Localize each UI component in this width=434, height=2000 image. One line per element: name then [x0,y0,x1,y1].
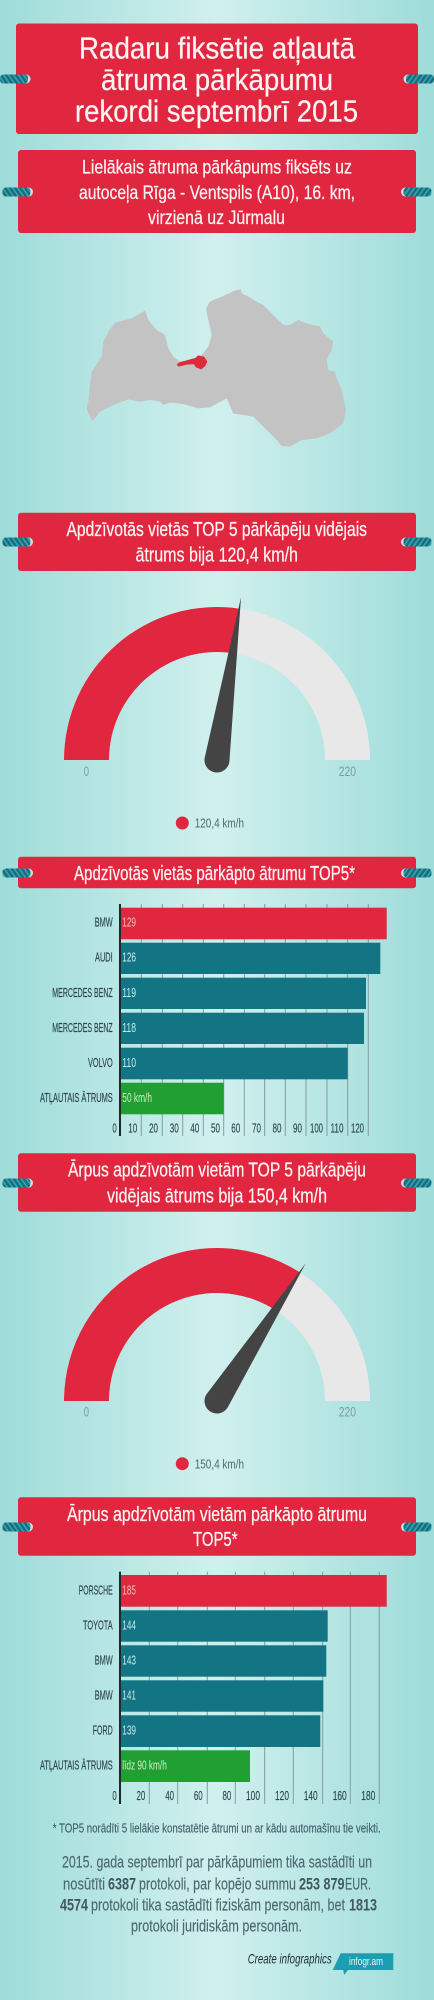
summary paragraph: protokoli juridiskām personām. [131,1917,302,1936]
bar chart: outside populated areas: BMW [95,1688,113,1702]
bar chart: outside populated areas: 144 [122,1618,136,1632]
bar chart: outside populated areas: FORD [93,1724,113,1738]
summary paragraph [60,1853,377,1936]
credit: Create infographics: Create infographics [248,1950,332,1966]
bar chart: populated areas: 119 [122,986,136,1000]
bar chart: populated areas: 50 km/h [122,1091,152,1105]
gauge: 120,4 km/h [64,597,370,831]
bar chart: outside populated areas: TOYOTA [83,1618,113,1632]
title panel: ātruma pārkāpumu [101,62,333,97]
title panel [0,24,434,134]
axis labels: 30 [170,1121,179,1136]
summary paragraph: 253 879 [299,1874,344,1893]
subtitle panel: biggest violation: virzienā uz Jūrmalu [148,207,285,229]
axis labels: 100 [310,1121,323,1136]
bar chart: outside populated areas: ATĻAUTAIS ĀTRUMS [40,1759,113,1773]
axis labels: 60 [231,1121,240,1136]
subtitle panel: biggest violation [2,150,432,233]
heading: outside populated areas average [2,1153,432,1212]
legend [176,1457,244,1471]
bar chart: populated areas: 118 [122,1021,136,1035]
axis labels: 0 [112,1788,117,1803]
title panel: rekordi septembrī 2015 [75,94,358,129]
axis labels [112,1788,375,1803]
bar chart: populated areas: ATĻAUTAIS ĀTRUMS [40,1091,113,1105]
axis labels: 100 [246,1788,260,1803]
axis labels: 110 [330,1121,344,1136]
highlighted road and Riga [177,355,207,369]
bar chart: outside populated areas: līdz 90 km/h [122,1759,167,1773]
bar chart: populated areas: MERCEDES BENZ [52,986,113,1000]
gauge: 120,4 km/h: 220 [339,763,356,779]
axis labels: 40 [190,1121,199,1136]
gauge: 150,4 km/h [64,1248,370,1471]
axis labels: 120 [275,1788,289,1803]
map of Latvia [87,289,346,447]
heading: outside populated areas TOP5 [2,1497,432,1556]
legend: 120,4 km/h [195,817,244,831]
icon: infogr.am logo: infogr.am [349,1956,383,1968]
heading: outside populated areas TOP5: TOP5* [193,1528,238,1551]
summary paragraph: nosūtīti [63,1874,105,1893]
icon: infogr.am logo [333,1953,393,1975]
title panel: Radaru fiksētie atļautā [79,31,356,66]
bar chart: outside populated areas: BMW [95,1654,113,1668]
summary paragraph: protokoli, par kopējo summu [139,1874,296,1893]
summary paragraph: protokoli tika sastādīti fiziskām personām, bet [91,1895,345,1914]
summary paragraph: 1813 [349,1895,377,1914]
axis labels: 70 [252,1121,261,1136]
credit: Create infographics [248,1950,393,1975]
axis labels: 40 [165,1788,174,1803]
bar chart: outside populated areas [40,1572,387,1804]
axis labels: 90 [293,1121,302,1136]
gauge: 150,4 km/h: 220 [339,1404,356,1420]
summary paragraph: 6387 [108,1874,136,1893]
bar chart: populated areas: 126 [122,951,136,965]
bar chart: populated areas [40,904,387,1136]
bar chart: outside populated areas: PORSCHE [79,1583,113,1597]
axis labels: 180 [361,1788,375,1803]
heading: outside populated areas average: vidējais ātrums bija 150,4 km/h [107,1185,327,1207]
axis labels: 10 [128,1121,137,1136]
bar chart: populated areas: VOLVO [88,1056,113,1070]
heading: populated areas average: ātrums bija 120,4 km/h [136,545,298,567]
summary paragraph: EUR. [345,1874,371,1893]
bar chart: populated areas: AUDI [95,951,113,965]
summary paragraph: 4574 [60,1895,88,1914]
legend: 150,4 km/h [195,1457,244,1471]
gauge: 150,4 km/h: 0 [84,1404,89,1420]
axis labels [112,1121,364,1136]
bar chart: populated areas: 110 [122,1056,136,1070]
axis labels: 80 [222,1788,231,1803]
legend [176,816,244,831]
axis labels: 20 [149,1121,158,1136]
heading: populated areas TOP5 [2,857,432,888]
heading: populated areas average [2,513,432,571]
subtitle panel: biggest violation: Lielākais ātruma pārkāpums fiksēts uz [82,157,352,179]
bar chart: populated areas: MERCEDES BENZ [52,1021,113,1035]
axis labels: 160 [333,1788,347,1803]
bar chart: outside populated areas: 141 [122,1688,136,1702]
bar chart: outside populated areas: 185 [122,1583,136,1597]
bar chart: populated areas: BMW [95,916,113,930]
axis labels: 140 [304,1788,318,1803]
bar chart: populated areas: 129 [122,916,136,930]
bar chart: outside populated areas: 139 [122,1724,136,1738]
axis labels: 60 [194,1788,203,1803]
axis labels: 50 [211,1121,220,1136]
axis labels: 20 [136,1788,145,1803]
axis labels: 80 [272,1121,282,1136]
axis labels: 120 [351,1121,364,1136]
axis labels: 0 [112,1121,117,1136]
gauge: 120,4 km/h: 0 [84,763,89,779]
bar chart: outside populated areas: 143 [122,1654,136,1668]
subtitle panel: biggest violation: autoceļa Rīga - Ventspils (A10), 16. km, [79,182,355,204]
